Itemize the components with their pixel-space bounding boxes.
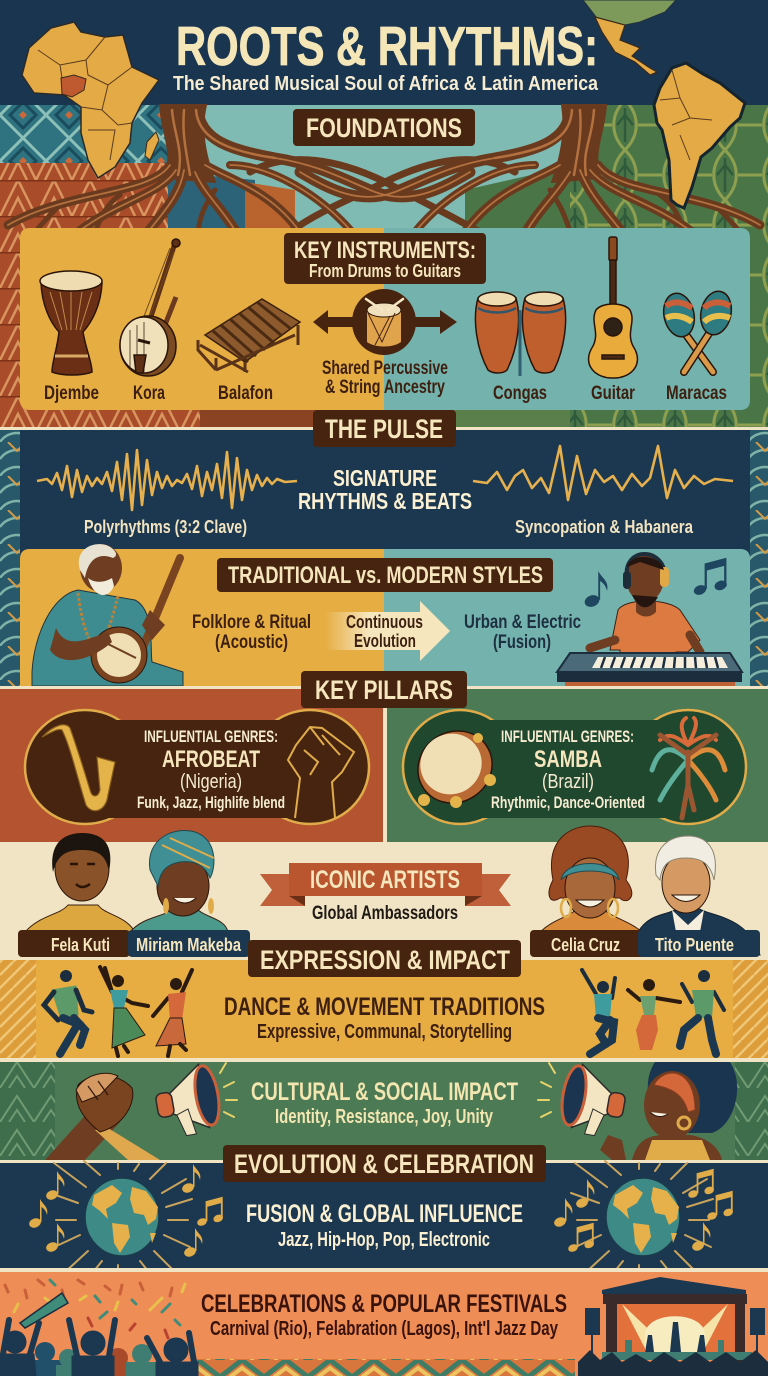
title bbox=[173, 15, 599, 95]
text: folklore bbox=[192, 612, 311, 653]
icon: megaphone left bbox=[151, 1062, 224, 1140]
heading: key instruments bbox=[284, 233, 486, 284]
icon: party horn bbox=[20, 1293, 68, 1328]
label: Fela Kuti bbox=[18, 930, 130, 957]
text: urban: Urban & Electric bbox=[464, 612, 581, 633]
figure: elder musician bbox=[32, 544, 183, 686]
text: signature rhythms heading: RHYTHMS & BEATS bbox=[298, 488, 472, 514]
band: pulse background pattern bbox=[0, 427, 768, 688]
icon: saxophone bbox=[42, 725, 115, 811]
icon: congas bbox=[475, 292, 566, 376]
banner: iconic artists bbox=[260, 863, 511, 906]
icon: maracas bbox=[660, 288, 735, 372]
heading: traditional vs modern: TRADITIONAL vs. MODERN STYLES bbox=[228, 562, 543, 589]
figures: crowd left bbox=[0, 1320, 198, 1376]
icon: raised fist bbox=[288, 727, 354, 818]
portrait: Tito Puente bbox=[638, 836, 760, 955]
text: signature rhythms heading bbox=[298, 465, 472, 514]
text: shared ancestry bbox=[322, 358, 448, 398]
label: Fela Kuti: Fela Kuti bbox=[51, 935, 110, 955]
icon: sound lines right bbox=[538, 1063, 555, 1117]
text: folklore: Folklore & Ritual bbox=[192, 612, 311, 633]
divider and pillar panels bbox=[0, 686, 768, 842]
title: The Shared Musical Soul of Africa & Latin America bbox=[173, 73, 599, 95]
text: instrument labels right bbox=[493, 383, 727, 404]
foundations background patterns bbox=[0, 105, 768, 430]
text: folklore: (Acoustic) bbox=[215, 632, 288, 653]
panel: samba bbox=[403, 710, 746, 824]
text: afrobeat labels bbox=[137, 727, 285, 812]
icon: shared drum with arrows bbox=[313, 289, 457, 355]
icon: guitar bbox=[589, 237, 637, 378]
heading: evolution and celebration bbox=[223, 1145, 546, 1182]
text: instrument labels left: Kora bbox=[133, 383, 165, 404]
icon: djembe bbox=[40, 271, 102, 375]
text: signature rhythms heading: SIGNATURE bbox=[333, 465, 437, 491]
chart: syncopation waveform bbox=[473, 446, 733, 500]
figures: crowd muted bbox=[28, 1342, 158, 1376]
text: dance heading bbox=[224, 993, 545, 1043]
panel: traditional vs modern bbox=[20, 544, 750, 686]
icon: megaphone right bbox=[557, 1062, 630, 1140]
heading: foundations: FOUNDATIONS bbox=[306, 113, 462, 143]
text: afrobeat labels: (Nigeria) bbox=[180, 771, 242, 793]
icon: sound lines left bbox=[220, 1063, 237, 1117]
title: ROOTS & RHYTHMS: bbox=[176, 15, 598, 77]
heading: traditional vs modern bbox=[217, 558, 553, 592]
arrow: continuous evolution: Evolution bbox=[354, 631, 416, 651]
figure: DJ at keyboard bbox=[557, 554, 742, 686]
text: afrobeat labels: AFROBEAT bbox=[162, 746, 260, 773]
text: global ambassadors: Global Ambassadors bbox=[312, 903, 458, 924]
band: iconic artists bbox=[0, 826, 768, 962]
arrow: continuous evolution: Continuous bbox=[346, 612, 423, 632]
text: urban: (Fusion) bbox=[493, 632, 551, 653]
text: dance heading: Expressive, Communal, Storytelling bbox=[257, 1021, 512, 1043]
icon: globe right bbox=[571, 1161, 713, 1273]
portrait: Miriam Makeba bbox=[130, 831, 228, 932]
icons: notes right bbox=[553, 1169, 734, 1253]
text: dance heading: DANCE & MOVEMENT TRADITIONS bbox=[224, 993, 545, 1021]
text: celebrations heading: Carnival (Rio), Felabration (Lagos), Int'l Jazz Day bbox=[210, 1318, 559, 1340]
heading: key pillars bbox=[301, 671, 467, 708]
panel: signature rhythms bbox=[20, 431, 750, 548]
icon: samba dancer bbox=[652, 718, 725, 818]
text: instrument labels right: Maracas bbox=[666, 383, 727, 404]
panel: afrobeat bbox=[25, 710, 369, 824]
band: celebrations and festivals bbox=[0, 1268, 768, 1376]
text: fusion heading bbox=[246, 1200, 523, 1251]
icons: notes left bbox=[28, 1164, 224, 1258]
heading: expression and impact bbox=[248, 940, 521, 977]
portrait: Fela Kuti bbox=[25, 833, 135, 932]
text: cultural heading bbox=[251, 1078, 518, 1128]
label: Miriam Makeba: Miriam Makeba bbox=[136, 935, 242, 955]
text: shared ancestry: Shared Percussive bbox=[322, 358, 448, 379]
text: samba labels: SAMBA bbox=[534, 746, 602, 773]
label: Tito Puente: Tito Puente bbox=[655, 935, 734, 955]
text: afrobeat labels: Funk, Jazz, Highlife blend bbox=[137, 793, 285, 812]
figures: dancers left bbox=[44, 967, 192, 1056]
text: fusion heading: Jazz, Hip-Hop, Pop, Electronic bbox=[278, 1229, 490, 1251]
text: cultural heading: CULTURAL & SOCIAL IMPACT bbox=[251, 1078, 518, 1106]
heading: the pulse bbox=[313, 410, 456, 447]
band: dance and movement bbox=[0, 960, 768, 1058]
icon: tambourine bbox=[404, 717, 506, 817]
heading: evolution and celebration: EVOLUTION & CELEBRATION bbox=[234, 1149, 534, 1179]
heading: key pillars: KEY PILLARS bbox=[315, 675, 453, 705]
label: Miriam Makeba bbox=[128, 930, 250, 957]
panel: key instruments bbox=[20, 228, 750, 410]
heading: the pulse: THE PULSE bbox=[325, 414, 443, 444]
portrait: Celia Cruz bbox=[540, 826, 642, 932]
heading: foundations bbox=[293, 109, 475, 146]
text: instrument labels right: Guitar bbox=[591, 383, 635, 404]
text: samba labels bbox=[491, 727, 645, 812]
text: urban bbox=[464, 612, 581, 653]
text: celebrations heading: CELEBRATIONS & POPULAR FESTIVALS bbox=[201, 1290, 567, 1318]
heading: key instruments: KEY INSTRUMENTS: bbox=[294, 237, 476, 264]
map: Latin America bbox=[583, 0, 745, 208]
icon: clasped hands bbox=[45, 1073, 160, 1160]
figures: dancers right bbox=[582, 970, 724, 1054]
banner: iconic artists: ICONIC ARTISTS bbox=[310, 866, 460, 894]
band: fusion and global influence bbox=[0, 1160, 768, 1273]
text: samba labels: (Brazil) bbox=[542, 771, 594, 793]
header band bbox=[0, 0, 768, 105]
chart: polyrhythm waveform bbox=[37, 450, 297, 510]
icon: globe left bbox=[50, 1161, 192, 1273]
figure: woman with megaphone bbox=[600, 1062, 737, 1160]
text: shared ancestry: & String Ancestry bbox=[325, 377, 445, 398]
text: instrument labels left: Balafon bbox=[218, 383, 273, 404]
roots illustration bbox=[8, 105, 760, 232]
label: Celia Cruz: Celia Cruz bbox=[551, 935, 620, 955]
text: fusion heading: FUSION & GLOBAL INFLUENCE bbox=[246, 1200, 523, 1228]
text: syncopation: Syncopation & Habanera bbox=[515, 517, 694, 537]
heading: key instruments: From Drums to Guitars bbox=[309, 261, 461, 281]
arrow: continuous evolution bbox=[325, 601, 450, 661]
text: instrument labels left bbox=[44, 383, 273, 404]
icon: concert stage bbox=[578, 1277, 768, 1376]
text: afrobeat labels: INFLUENTIAL GENRES: bbox=[144, 727, 278, 746]
label: Celia Cruz bbox=[530, 930, 645, 957]
text: cultural heading: Identity, Resistance, Joy, Unity bbox=[275, 1106, 494, 1128]
icon: balafon bbox=[198, 299, 300, 372]
icon: kora bbox=[120, 239, 180, 376]
text: instrument labels left: Djembe bbox=[44, 383, 99, 404]
text: polyrhythms: Polyrhythms (3:2 Clave) bbox=[84, 517, 247, 537]
text: celebrations heading bbox=[201, 1290, 567, 1340]
map: Africa bbox=[22, 22, 159, 178]
pattern strip: chevrons bbox=[195, 1359, 575, 1376]
text: instrument labels right: Congas bbox=[493, 383, 547, 404]
heading: expression and impact: EXPRESSION & IMPACT bbox=[260, 945, 510, 975]
band: cultural and social impact bbox=[0, 1058, 768, 1160]
text: samba labels: Rhythmic, Dance-Oriented bbox=[491, 793, 645, 812]
confetti bbox=[5, 1280, 185, 1338]
text: samba labels: INFLUENTIAL GENRES: bbox=[501, 727, 634, 746]
label: Tito Puente bbox=[638, 930, 760, 957]
